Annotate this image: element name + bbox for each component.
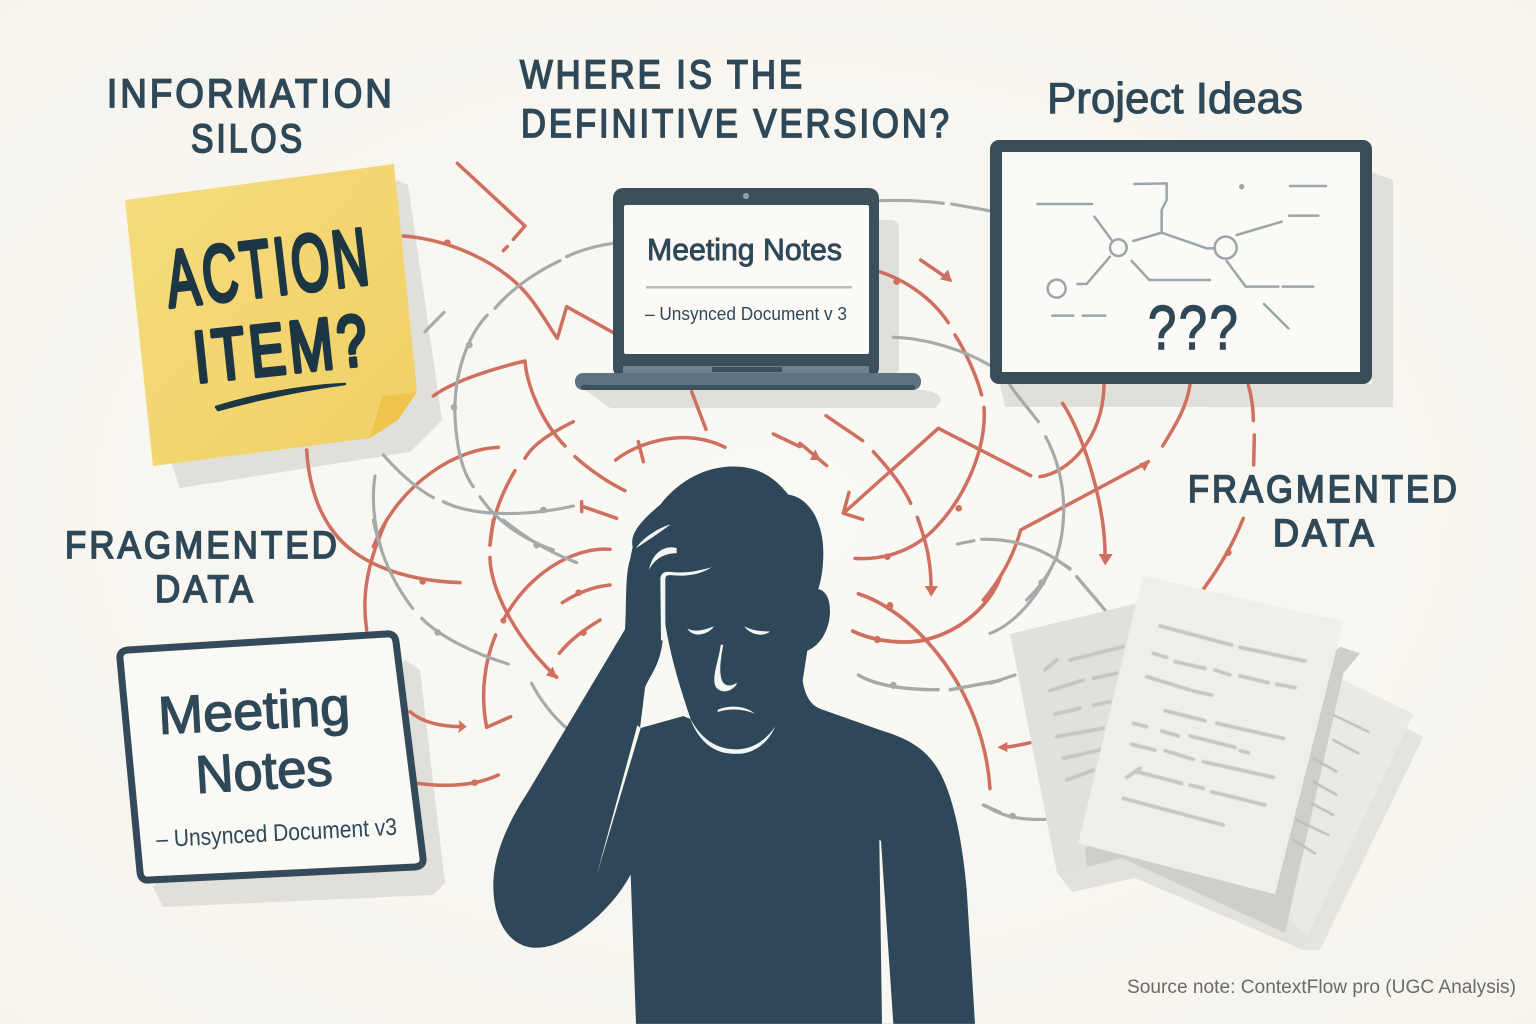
heading: fragmented data right: FRAGMENTED xyxy=(1188,469,1460,511)
heading: fragmented data left xyxy=(65,525,340,611)
arrows: lower left xyxy=(330,520,610,786)
drop shadows xyxy=(153,172,1393,907)
laptop text xyxy=(645,232,852,324)
front page lines xyxy=(1123,626,1305,825)
arrows: lower right xyxy=(853,578,1000,812)
shirt fold xyxy=(879,840,893,1024)
laptop text: Meeting Notes xyxy=(647,232,842,267)
paper stack xyxy=(1010,576,1423,950)
face xyxy=(687,626,770,714)
diagram xyxy=(1037,183,1326,328)
card text: Meeting xyxy=(157,677,351,746)
heading: project ideas: Project Ideas xyxy=(1047,74,1303,123)
arrows: upper right xyxy=(800,200,1254,600)
sticky text xyxy=(161,211,376,410)
arrows: upper left xyxy=(307,163,800,550)
card text xyxy=(156,677,398,853)
heading: information silos: INFORMATION xyxy=(107,72,395,116)
laptop text: – Unsynced Document v 3 xyxy=(645,304,847,324)
source note: Source note: ContextFlow pro (UGC Analysis) xyxy=(1127,977,1516,998)
heading: definitive version xyxy=(520,53,952,146)
sticky text: ACTION xyxy=(161,211,376,324)
chin line xyxy=(690,718,775,754)
heading: information silos: SILOS xyxy=(191,117,305,161)
card text: – Unsynced Document v3 xyxy=(156,814,398,853)
laptop xyxy=(575,188,921,390)
heading: fragmented data left: DATA xyxy=(155,569,256,611)
sticky note xyxy=(125,164,417,466)
heading: information silos xyxy=(107,72,395,161)
gaps between arm, face and shoulder xyxy=(640,622,691,728)
heading: definitive version: DEFINITIVE VERSION? xyxy=(521,102,952,146)
monitor with diagram xyxy=(996,146,1366,378)
tangled arrows xyxy=(307,163,1254,819)
hair and brow strokes xyxy=(636,524,712,640)
person silhouette xyxy=(493,466,975,1024)
sticky text: ITEM? xyxy=(190,300,375,398)
arrows: near papers xyxy=(990,560,1105,819)
heading: fragmented data right: DATA xyxy=(1273,513,1377,555)
heading: fragmented data left: FRAGMENTED xyxy=(65,525,340,567)
card text: Notes xyxy=(194,738,334,805)
meeting notes card xyxy=(120,634,423,880)
heading: fragmented data right xyxy=(1188,469,1460,555)
question marks: ??? xyxy=(1148,294,1240,363)
heading: definitive version: WHERE IS THE xyxy=(520,53,805,97)
back page lines xyxy=(1045,647,1368,853)
